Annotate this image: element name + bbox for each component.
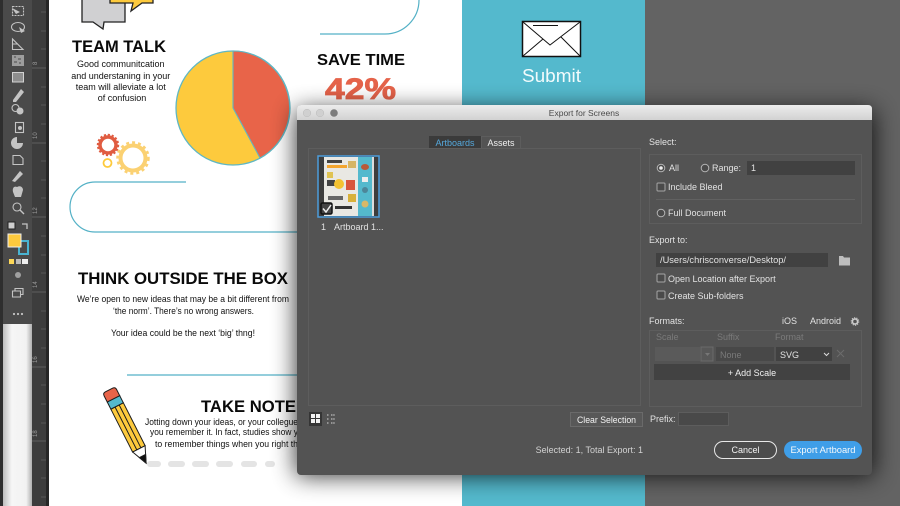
select section: All — [669, 163, 679, 173]
view toggle buttons — [309, 412, 335, 426]
formats section — [649, 316, 862, 406]
vertical ruler: 16 — [33, 356, 39, 363]
tab: artboards — [429, 136, 481, 148]
artboards panel outline — [308, 148, 640, 406]
icon: settings gear — [851, 318, 859, 325]
vertical ruler — [32, 0, 49, 506]
select section: Range: — [712, 163, 741, 173]
left tools panel — [0, 0, 32, 506]
dashed line under pencil — [147, 461, 275, 467]
selection status: Selected: 1, Total Export: 1 — [536, 445, 643, 455]
button: cancel: Cancel — [731, 445, 760, 455]
button: export artboard — [784, 441, 862, 459]
heading: take notes: TAKE NOTE — [201, 398, 296, 416]
dialog title bar: Export for Screens — [549, 108, 619, 118]
select section: Include Bleed — [668, 182, 723, 192]
vertical ruler: 10 — [33, 132, 39, 139]
text block: take notes: Jotting down your ideas, or your collegue — [145, 417, 298, 427]
export to section: Create Sub-folders — [668, 291, 744, 301]
icon: envelope — [522, 22, 580, 56]
curved connector: top — [320, 0, 419, 34]
select section: Full Document — [668, 208, 727, 218]
submit label: Submit — [522, 66, 581, 86]
text block: think outside the box — [77, 294, 289, 338]
button: export artboard: Export Artboard — [790, 445, 856, 455]
formats section: Formats: — [649, 316, 685, 326]
export to section: /Users/chrisconverse/Desktop/ — [660, 255, 787, 265]
button: clear selection: Clear Selection — [577, 415, 636, 425]
text block: team talk: Good communitcation — [77, 59, 165, 69]
formats section: iOS — [782, 316, 797, 326]
artboard page — [49, 0, 645, 506]
thumbnail checkbox — [321, 203, 332, 214]
prefix field — [650, 412, 728, 426]
button: clear selection — [570, 412, 642, 426]
statistic: 42%: 42% — [325, 73, 396, 106]
curved connector: middle — [70, 182, 300, 232]
heading: team talk: TEAM TALK — [72, 38, 166, 56]
pie chart — [176, 51, 290, 165]
prefix field: Prefix: — [650, 414, 676, 424]
icon: fill and stroke swatches — [8, 234, 28, 254]
formats section: Android — [810, 316, 841, 326]
panel: submit column — [462, 0, 645, 506]
tab: assets: Assets — [487, 138, 515, 148]
vertical ruler: 12 — [33, 207, 39, 214]
formats section: Format — [775, 332, 804, 342]
artboard thumbnail — [318, 156, 379, 217]
text block: take notes: to remember things when you right th — [155, 439, 298, 449]
thumbnail caption: Artboard 1... — [334, 222, 384, 232]
text block: team talk: team will alleviate a lot — [76, 82, 166, 92]
heading: think outside the box: THINK OUTSIDE THE BOX — [78, 270, 288, 288]
text block: think outside the box: Your idea could be the next ‘big’ thng! — [111, 328, 255, 338]
text block: think outside the box: We’re open to new ideas that may be a bit different from — [77, 294, 289, 304]
button: add scale: + Add Scale — [728, 368, 776, 378]
formats section: SVG — [780, 350, 799, 360]
text block: think outside the box: ‘the norm’. There’s no wrong answers. — [113, 306, 254, 316]
select section — [649, 137, 862, 224]
export to section — [649, 235, 850, 301]
export to section: Open Location after Export — [668, 274, 776, 284]
vertical ruler: 8 — [33, 61, 39, 65]
thumbnail caption: 1 — [321, 222, 326, 232]
panel: export for screens dialog — [297, 105, 872, 475]
icon: pencil — [103, 387, 152, 466]
formats section: None — [720, 350, 742, 360]
dialog title bar — [297, 105, 872, 120]
button: add scale — [654, 364, 850, 380]
tab: artboards: Artboards — [435, 138, 475, 148]
text block: team talk: of confusion — [98, 93, 146, 103]
divider line — [127, 374, 300, 376]
dialog shadow — [296, 110, 874, 476]
icon: gears — [98, 135, 148, 174]
formats section: Suffix — [717, 332, 740, 342]
vertical ruler: 18 — [33, 430, 39, 437]
button: cancel — [714, 442, 776, 458]
tab: assets — [482, 136, 520, 148]
text block: take notes: you remember it. In fact, studies show y — [150, 427, 298, 437]
text block: team talk: and understaning in your — [71, 71, 170, 81]
formats section: Scale — [656, 332, 679, 342]
heading: save time: SAVE TIME — [317, 52, 405, 69]
select section: Select: — [649, 137, 677, 147]
icon: folder — [839, 256, 850, 266]
vertical ruler: 14 — [33, 281, 39, 288]
select section: 1 — [751, 163, 756, 173]
text block: take notes — [145, 417, 298, 449]
icon: chat bubbles — [82, 0, 153, 29]
export to section: Export to: — [649, 235, 688, 245]
